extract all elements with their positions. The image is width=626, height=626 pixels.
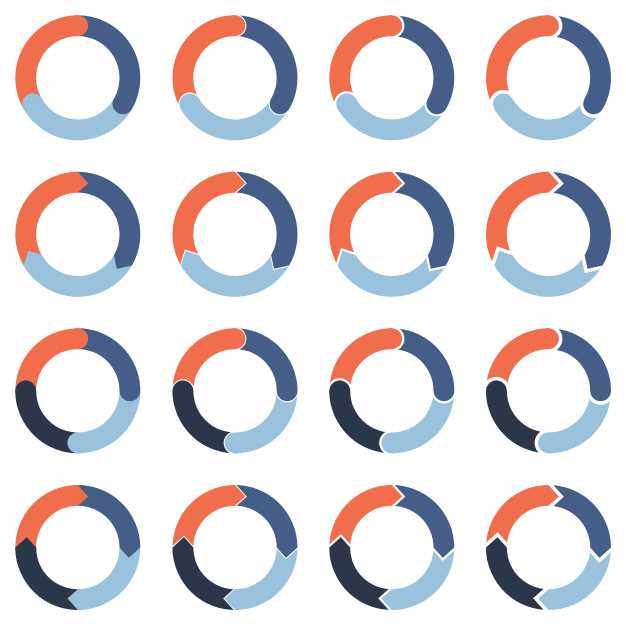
arrow: blue	[357, 163, 477, 275]
ring: row 4 column 2, four arrow segments with thin gap	[172, 485, 298, 610]
arrow: light blue	[538, 544, 611, 610]
arrow: orange	[15, 172, 88, 268]
arrow head: light blue	[176, 245, 208, 280]
ring: row 4 column 3, four arrow segments with medium gap	[329, 485, 454, 610]
segment head: light blue	[489, 89, 522, 123]
segment head: light blue	[332, 89, 365, 123]
arrow: orange	[329, 485, 402, 551]
arrow head: navy	[15, 537, 38, 564]
segment: orange	[486, 15, 559, 112]
arrow: blue	[43, 163, 163, 275]
segment: blue	[389, 328, 454, 401]
segment: blue	[43, 7, 163, 118]
ring: row 4 column 1, four arrow segments	[15, 485, 140, 610]
segment: light blue	[489, 52, 609, 163]
segment head: navy	[486, 380, 508, 407]
arrow: blue	[545, 485, 611, 558]
ring: row 3 column 2, four rounded segments with thin gap	[172, 328, 298, 453]
segment head: navy	[329, 380, 352, 407]
arrow head: light blue	[18, 245, 51, 280]
arrow: light blue	[332, 208, 453, 320]
arrow: blue	[75, 485, 140, 558]
arrow: blue	[200, 163, 320, 275]
segment: navy	[172, 380, 238, 453]
segment: light blue	[18, 52, 139, 163]
arrow: light blue	[18, 208, 139, 320]
segment: orange	[15, 15, 88, 112]
segment: orange	[486, 328, 559, 394]
segment head: navy	[15, 380, 38, 407]
segment: orange	[329, 15, 402, 112]
segment: blue	[545, 328, 611, 401]
segment: blue	[357, 7, 477, 118]
segment: blue	[200, 7, 320, 118]
arrow: blue	[232, 485, 298, 558]
segment: light blue	[176, 52, 296, 163]
segment: light blue	[67, 388, 140, 453]
segment: orange	[173, 328, 245, 394]
arrow: blue	[389, 485, 454, 558]
arrow: navy	[329, 537, 395, 610]
ring: row 2 column 1, three arrow segments	[15, 163, 163, 320]
arrow: light blue	[489, 208, 609, 320]
segment: blue	[75, 328, 140, 401]
arrow: orange	[329, 172, 402, 268]
segment head: light blue	[18, 89, 51, 123]
arrow: light blue	[381, 544, 454, 610]
arrow head: light blue	[332, 245, 365, 280]
arrow: orange	[486, 485, 559, 551]
segment: navy	[329, 380, 395, 453]
ring: row 2 column 3, three arrow segments with medium gap	[329, 163, 477, 320]
arrow: light blue	[67, 544, 140, 610]
ring: row 3 column 3, four rounded segments with medium gap	[329, 328, 454, 453]
arrow: navy	[15, 537, 81, 610]
arrow: light blue	[176, 208, 296, 320]
segment: blue	[514, 7, 626, 118]
arrow: orange	[15, 485, 88, 551]
arrow: orange	[486, 172, 559, 268]
arrow: orange	[172, 172, 245, 268]
segment: navy	[15, 380, 81, 453]
segment head: navy	[172, 380, 195, 407]
segment: light blue	[225, 388, 297, 453]
ring: row 3 column 1, four rounded segments	[15, 328, 140, 453]
ring: row 2 column 4, three arrow segments with wide gap	[486, 163, 626, 320]
arrow: light blue	[225, 544, 297, 610]
segment head: light blue	[176, 89, 208, 123]
arrow head: navy	[172, 537, 195, 564]
arrow head: light blue	[489, 245, 522, 280]
arrow: blue	[514, 163, 626, 275]
segment: blue	[232, 328, 298, 401]
segment: light blue	[332, 52, 453, 163]
segment: orange	[172, 15, 245, 112]
arrow: orange	[173, 485, 245, 551]
arrow head: navy	[486, 537, 508, 564]
ring: row 1 column 2, three rounded segments with thin gap	[172, 7, 320, 163]
ring: row 1 column 1, three rounded segments	[15, 7, 163, 163]
ring: row 1 column 3, three rounded segments with medium gap	[329, 7, 477, 163]
segment: light blue	[381, 388, 454, 453]
segment: navy	[486, 380, 552, 453]
segment: orange	[329, 328, 402, 394]
ring: row 4 column 4, four arrow segments with wide gap	[486, 485, 611, 610]
arrow: navy	[172, 537, 238, 610]
arrow: navy	[486, 537, 552, 610]
ring: row 3 column 4, four rounded segments with wide gap	[486, 328, 611, 453]
segment: light blue	[538, 388, 611, 453]
ring: row 2 column 2, three arrow segments with thin gap	[172, 163, 320, 320]
ring: row 1 column 4, three rounded segments with wide gap	[486, 7, 626, 163]
arrow head: navy	[329, 537, 352, 564]
segment: orange	[15, 328, 88, 394]
